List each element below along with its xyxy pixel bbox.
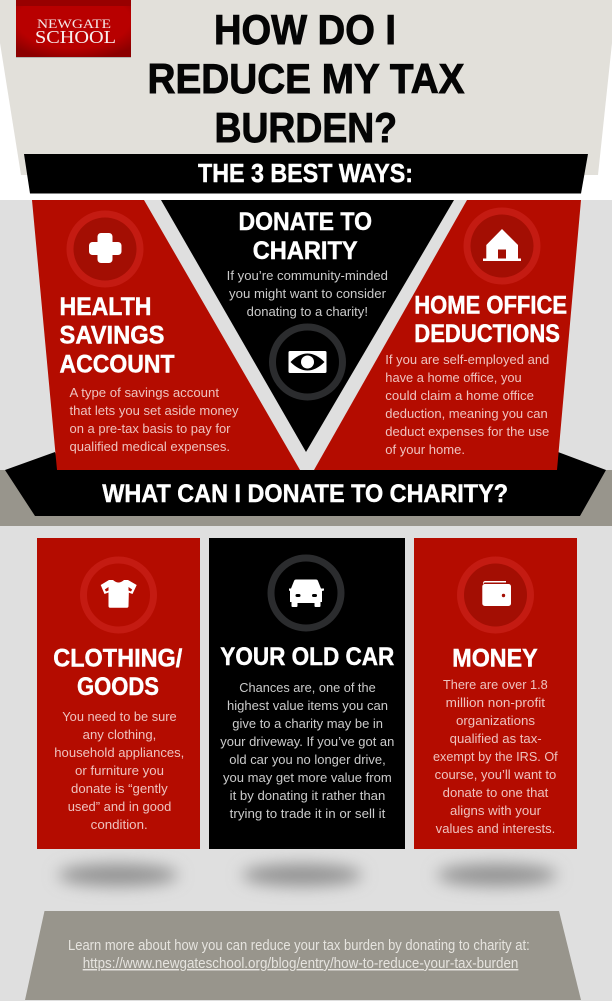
text block: give to a charity may be in: [232, 716, 383, 731]
text block: of your home.: [385, 442, 465, 457]
heading: [60, 293, 174, 378]
text block: qualified as tax-: [450, 731, 542, 746]
text block: deduction, meaning you can: [385, 406, 548, 421]
icon: t-shirt: [84, 560, 154, 630]
text block: [433, 677, 558, 836]
logo: Newgate School: NEWGATE: [37, 16, 111, 31]
text block: you might want to consider: [229, 286, 387, 301]
text block: [70, 385, 239, 454]
heading: CLOTHING/: [53, 644, 182, 672]
text block: household appliances,: [54, 745, 184, 760]
text block: course, you’ll want to: [435, 767, 556, 782]
icon: house: [464, 208, 540, 284]
text block: could claim a home office: [385, 388, 534, 403]
footer text: [68, 938, 530, 972]
text block: used” and in good: [68, 799, 171, 814]
icon: car: [271, 558, 341, 628]
text block: highest value items you can: [227, 698, 388, 713]
panel: donate to charity: [161, 200, 454, 452]
title: BURDEN?: [214, 104, 397, 151]
heading: SAVINGS: [60, 322, 164, 350]
text block: [220, 680, 394, 821]
panel: money: [414, 538, 577, 849]
text block: There are over 1.8: [443, 677, 548, 692]
banner: what can I donate to charity: [5, 452, 606, 516]
text block: or furniture you: [75, 763, 164, 778]
text block: that lets you set aside money: [70, 403, 239, 418]
text block: any clothing,: [83, 727, 156, 742]
text block: [227, 268, 388, 319]
text block: If you’re community-minded: [227, 268, 388, 283]
text block: exempt by the IRS. Of: [433, 749, 558, 764]
ribbon: taupe backing: [0, 470, 612, 526]
text block: it by donating it rather than: [230, 788, 385, 803]
text block: donating to a charity!: [247, 304, 368, 319]
icon: wallet: [457, 556, 534, 634]
heading: YOUR OLD CAR: [220, 643, 394, 671]
text block: organizations: [456, 713, 536, 728]
text block: A type of savings account: [70, 385, 219, 400]
panel: health savings account: [32, 200, 300, 470]
text block: million non-profit: [446, 695, 545, 710]
heading: HEALTH: [60, 293, 152, 321]
heading: GOODS: [77, 673, 159, 701]
text block: have a home office, you: [385, 370, 522, 385]
text block: old car you no longer drive,: [229, 752, 386, 767]
icon: banknote: [272, 327, 342, 397]
panel: home office deductions: [314, 200, 581, 470]
heading: [53, 644, 182, 701]
text block: donate to one that: [443, 785, 549, 800]
title: REDUCE MY TAX: [148, 55, 464, 102]
logo: Newgate School: [16, 0, 131, 58]
heading: ACCOUNT: [60, 350, 174, 378]
text block: aligns with your: [450, 803, 542, 818]
text block: [54, 709, 184, 832]
heading: DEDUCTIONS: [414, 320, 560, 348]
banner: what can I donate to charity: WHAT CAN I DONATE TO CHARITY?: [102, 480, 508, 508]
footer text: https://www.newgateschool.org/blog/entry/how-to-reduce-your-tax-burden: [83, 956, 518, 972]
text block: trying to trade it in or sell it: [230, 806, 386, 821]
panel: your old car: [209, 538, 405, 849]
text block: condition.: [91, 817, 148, 832]
panel: clothing and goods: [37, 538, 200, 849]
heading: [238, 208, 372, 265]
title: [148, 6, 464, 151]
icon: medical cross: [66, 210, 144, 288]
heading: MONEY: [452, 644, 538, 672]
banner: the 3 best ways: [24, 154, 588, 194]
footer panel: [25, 911, 581, 1000]
text block: You need to be sure: [62, 709, 177, 724]
banner: the 3 best ways: THE 3 BEST WAYS:: [198, 158, 413, 188]
text block: [385, 352, 549, 457]
heading: [414, 292, 567, 348]
text block: values and interests.: [436, 821, 555, 836]
text block: donate is “gently: [71, 781, 168, 796]
logo: Newgate School: SCHOOL: [35, 27, 116, 47]
card shadows: [58, 864, 557, 886]
text block: deduct expenses for the use: [385, 424, 549, 439]
text block: Chances are, one of the: [239, 680, 376, 695]
footer text: Learn more about how you can reduce your tax burden by donating to charity at:: [68, 938, 530, 954]
text block: on a pre-tax basis to pay for: [70, 421, 231, 436]
text block: If you are self-employed and: [385, 352, 549, 367]
text block: qualified medical expenses.: [70, 439, 230, 454]
text block: your driveway. If you’ve got an: [220, 734, 394, 749]
title: HOW DO I: [214, 6, 396, 53]
header panel: [0, 0, 612, 175]
heading: HOME OFFICE: [414, 292, 567, 320]
heading: DONATE TO: [238, 208, 372, 236]
text block: you may get more value from: [223, 770, 392, 785]
heading: CHARITY: [253, 237, 358, 265]
